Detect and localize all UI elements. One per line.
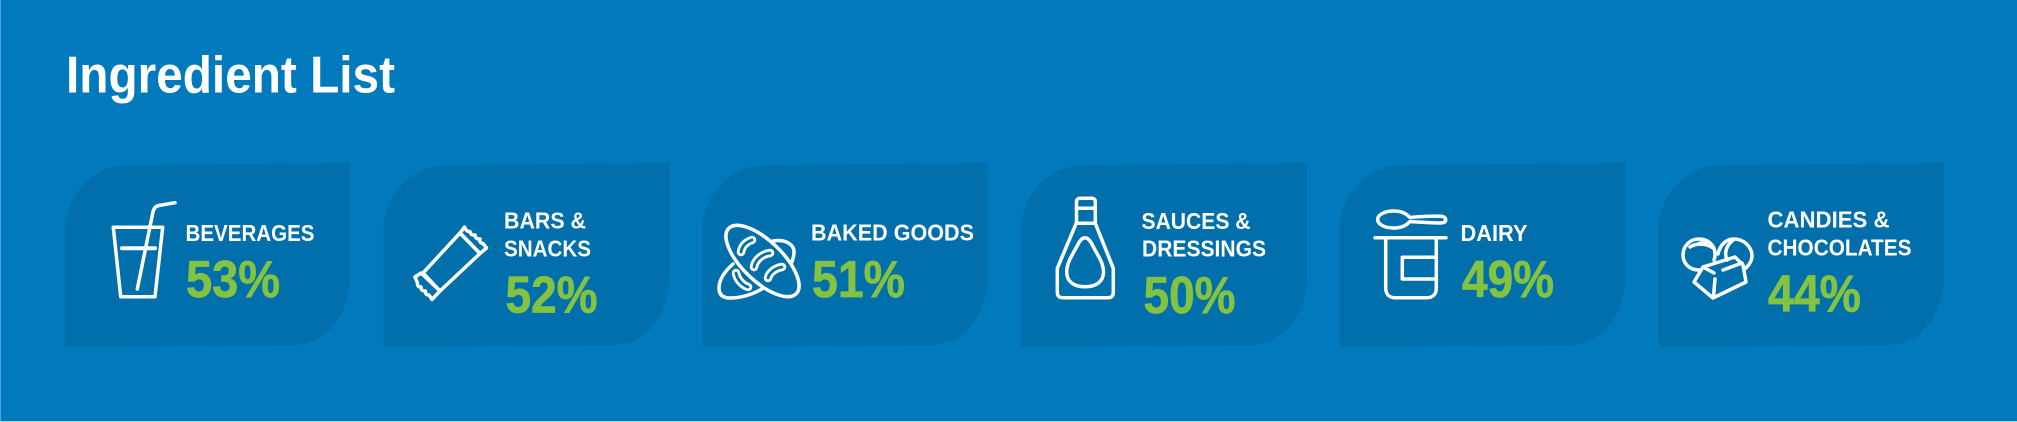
panel: bars and snacks (384, 163, 670, 347)
label: beverages: BEVERAGES (186, 220, 314, 246)
icon: bread loaves (715, 214, 810, 308)
icon: cup with straw (113, 203, 175, 297)
icon: yogurt cup and spoon (1375, 211, 1446, 298)
title: Ingredient List (66, 46, 395, 104)
value: 49%: 49% (1462, 251, 1554, 309)
icon: chocolates (1683, 239, 1752, 298)
label: baked goods: BAKED GOODS (811, 220, 974, 246)
panel: sauces and dressings (1021, 163, 1307, 347)
label: bars and snacks: SNACKS (504, 236, 591, 262)
value: 53%: 53% (186, 251, 280, 309)
panel: beverages (65, 163, 350, 347)
label: dairy: DAIRY (1460, 220, 1528, 246)
icon: dressing bottle (1057, 198, 1113, 298)
value: 51%: 51% (812, 251, 905, 309)
label: candies and chocolates (1768, 206, 1912, 260)
panel: dairy (1340, 163, 1626, 347)
value: 50%: 50% (1144, 267, 1236, 325)
icon: snack bar (415, 227, 486, 300)
label: bars and snacks (504, 208, 591, 262)
label: candies and chocolates: CANDIES & (1768, 206, 1890, 232)
value: 44%: 44% (1768, 266, 1861, 324)
label: sauces and dressings: DRESSINGS (1142, 236, 1266, 262)
label: candies and chocolates: CHOCOLATES (1768, 234, 1912, 260)
panel: baked goods (702, 163, 988, 347)
label: sauces and dressings (1142, 208, 1266, 262)
label: sauces and dressings: SAUCES & (1142, 208, 1250, 234)
value: 52%: 52% (506, 266, 598, 324)
label: bars and snacks: BARS & (504, 208, 586, 234)
panel: candies and chocolates (1658, 163, 1944, 347)
